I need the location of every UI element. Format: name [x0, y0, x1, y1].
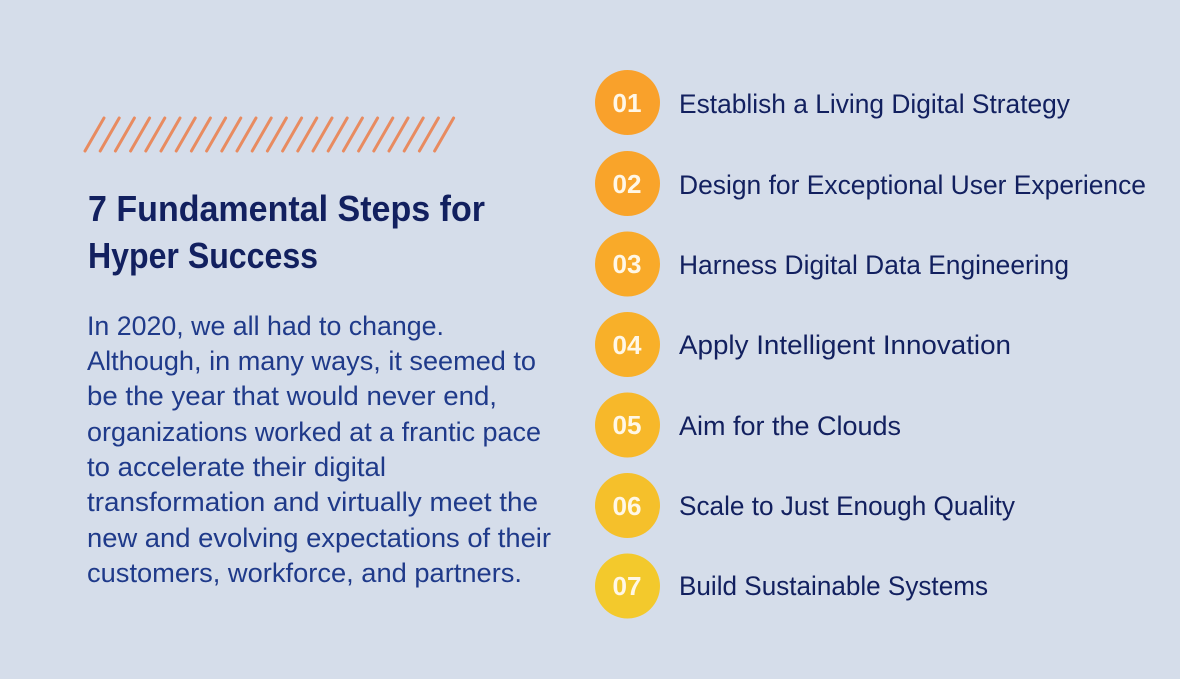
step 03: 03 — [612, 249, 642, 279]
intro paragraph: Although, in many ways, it seemed to — [87, 346, 536, 376]
decorative orange diagonal stripes — [85, 118, 454, 151]
step 07: Build Sustainable Systems — [679, 571, 988, 601]
step 04: 04 — [612, 330, 642, 360]
intro paragraph: In 2020, we all had to change. — [87, 311, 444, 341]
step 03: Harness Digital Data Engineering — [679, 250, 1069, 280]
step 02: Design for Exceptional User Experience — [679, 170, 1146, 200]
intro paragraph: customers, workforce, and partners. — [87, 558, 522, 588]
step 05: 05 — [612, 410, 642, 440]
step 01 — [595, 70, 1071, 135]
intro paragraph: new and evolving expectations of their — [87, 523, 551, 553]
intro paragraph: be the year that would never end, — [87, 381, 497, 411]
step 06: 06 — [612, 491, 642, 521]
step 06: Scale to Just Enough Quality — [679, 491, 1016, 521]
step 02: 02 — [612, 169, 642, 199]
step 07 — [595, 554, 988, 618]
step 05 — [595, 392, 901, 458]
step 07: 07 — [612, 571, 642, 601]
step 05: Aim for the Clouds — [679, 411, 901, 441]
step 01: 01 — [612, 88, 642, 118]
step 04 — [595, 312, 1011, 377]
step 02 — [595, 151, 1146, 216]
step 03 — [595, 232, 1069, 296]
intro paragraph: organizations worked at a frantic pace — [87, 417, 541, 447]
step 01: Establish a Living Digital Strategy — [679, 89, 1071, 119]
title: Hyper Success — [88, 235, 318, 276]
intro paragraph: transformation and virtually meet the — [87, 487, 538, 517]
step 04: Apply Intelligent Innovation — [679, 330, 1011, 360]
step 06 — [595, 473, 1016, 538]
intro paragraph — [87, 311, 551, 588]
title: 7 Fundamental Steps for — [88, 188, 485, 229]
title — [88, 188, 485, 276]
intro paragraph: to accelerate their digital — [87, 452, 386, 482]
